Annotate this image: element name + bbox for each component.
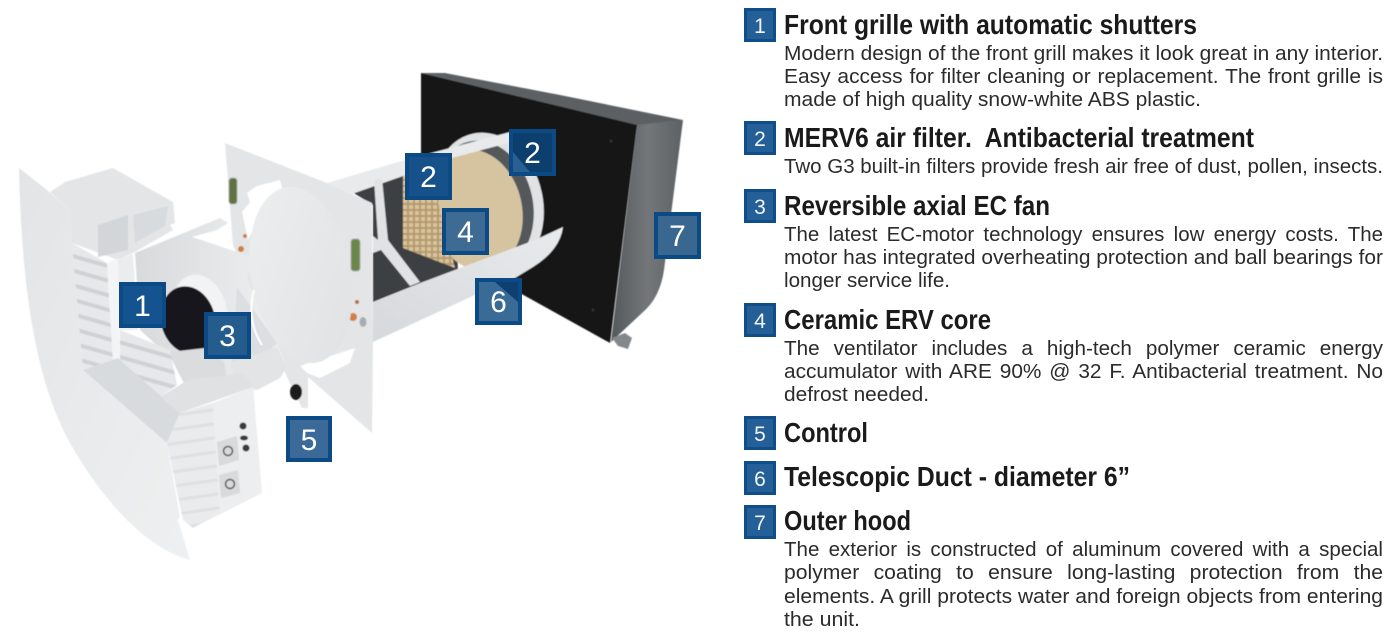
legend item 5: control: 5 xyxy=(754,423,766,446)
legend item 2: air filter xyxy=(744,121,1383,178)
legend item 7: outer hood xyxy=(744,505,1383,631)
front grille cover xyxy=(19,168,190,560)
legend item 5: control: Control xyxy=(784,417,868,448)
legend item 7: outer hood: 7 xyxy=(754,512,766,535)
callout marker 7: 7 xyxy=(669,220,686,253)
legend item 4: ceramic core xyxy=(744,303,1383,406)
legend item 2: air filter: Two G3 built-in filters provide fresh air free of dust, pollen, insects. xyxy=(784,156,1383,178)
grille body xyxy=(50,168,262,528)
callout marker 2 upper: 2 xyxy=(524,137,541,170)
legend item 3: fan xyxy=(744,189,1383,292)
callout marker 3: 3 xyxy=(219,320,236,353)
legend item 4: ceramic core: The ventilator includes a high-tech polymer ceramic energy xyxy=(784,338,1383,360)
legend item 1: front grille: Front grille with automatic shutters xyxy=(784,9,1197,40)
legend item 6: duct: 6 xyxy=(754,468,766,491)
legend item 6: duct: Telescopic Duct - diameter 6” xyxy=(784,461,1130,492)
callout marker 4 xyxy=(442,208,489,255)
legend item 3: fan: Reversible axial EC fan xyxy=(784,190,1050,221)
legend item 4: ceramic core: 4 xyxy=(754,310,766,333)
callout marker 2 lower: 2 xyxy=(420,161,437,194)
callout marker 1: 1 xyxy=(134,290,151,323)
legend item 1: front grille xyxy=(744,8,1383,111)
legend item 5: control xyxy=(744,416,868,450)
legend item 3: fan: longer service life. xyxy=(784,270,950,292)
legend item 3: fan: motor has integrated overheating protection and ball bearings for xyxy=(784,247,1383,269)
legend item 4: ceramic core: accumulator with ARE 90% @ 32 F. Antibacterial treatment. No xyxy=(784,361,1383,383)
legend item 7: outer hood: elements. A grill protects water and foreign objects from entering xyxy=(784,586,1383,608)
callout marker 6 xyxy=(475,278,522,325)
legend item 1: front grille: Modern design of the front grill makes it look great in any interior. xyxy=(784,43,1383,65)
legend item 2: air filter: 2 xyxy=(754,128,766,151)
legend item 7: outer hood: Outer hood xyxy=(784,505,911,536)
legend item 4: ceramic core: Ceramic ERV core xyxy=(784,304,991,335)
legend item 1: front grille: 1 xyxy=(754,15,766,38)
callout marker 7 xyxy=(654,212,701,259)
callout marker 2 lower xyxy=(405,153,452,200)
legend item 2: air filter: MERV6 air filter. Antibacterial treatment xyxy=(784,122,1254,153)
legend panel xyxy=(744,8,1383,631)
legend item 7: outer hood: The exterior is constructed of aluminum covered with a special xyxy=(784,539,1383,561)
mounting plate xyxy=(225,143,373,433)
legend item 1: front grille: made of high quality snow-white ABS plastic. xyxy=(784,89,1201,111)
telescopic duct and core xyxy=(327,122,563,342)
legend item 4: ceramic core: defrost needed. xyxy=(784,384,929,406)
legend item 3: fan: 3 xyxy=(754,196,766,219)
callout marker 6: 6 xyxy=(490,286,507,319)
legend item 7: outer hood: polymer coating to ensure long-lasting protection from the xyxy=(784,562,1383,584)
legend item 7: outer hood: the unit. xyxy=(784,609,860,631)
fan housing xyxy=(135,218,287,395)
callout marker 3 xyxy=(204,312,251,359)
callout marker 2 upper xyxy=(509,129,556,176)
disc cover xyxy=(236,179,366,371)
legend item 3: fan: The latest EC-motor technology ensures low energy costs. The xyxy=(784,224,1383,246)
callout marker 1 xyxy=(119,282,166,328)
callout marker 5: 5 xyxy=(301,424,317,457)
callout marker 5 xyxy=(286,416,332,462)
product illustration xyxy=(19,73,683,560)
outer hood xyxy=(421,73,683,349)
control panel with buttons xyxy=(217,422,250,498)
legend item 1: front grille: Easy access for filter cleaning or replacement. The front grille is xyxy=(784,66,1383,88)
callout marker 4: 4 xyxy=(457,216,474,249)
